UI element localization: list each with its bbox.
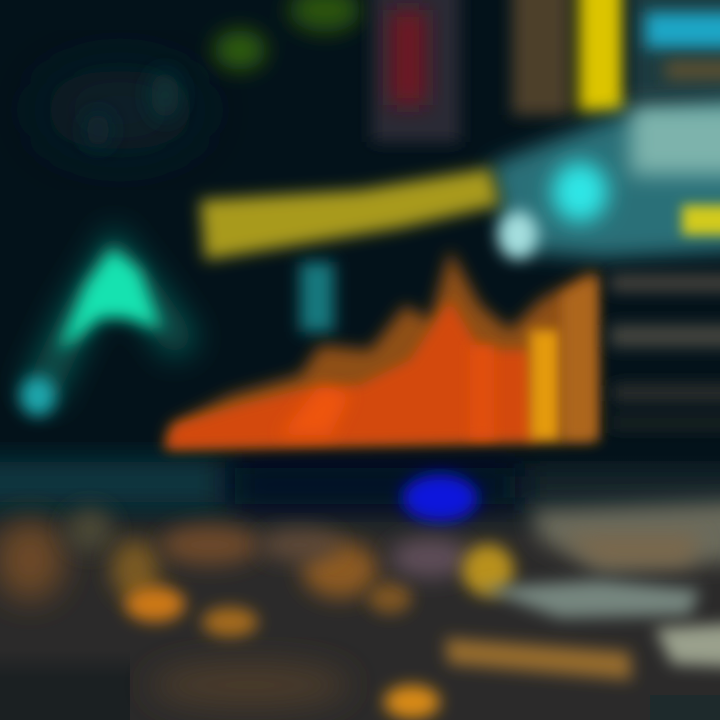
teal peak line chart [20, 248, 185, 416]
coin stacks right [390, 500, 720, 720]
top right bars [512, 0, 720, 115]
yellow headline band [200, 168, 500, 260]
green blobs [86, 0, 361, 148]
coin stacks left [0, 508, 412, 637]
bottom desk area [0, 462, 720, 720]
blue button [402, 474, 478, 522]
bottom foreground blobs [150, 661, 440, 719]
red panel at top [372, 0, 460, 142]
teal right panel [490, 100, 720, 259]
orange area chart [165, 250, 597, 448]
right table rows [610, 275, 720, 428]
top dark screen tint [40, 70, 200, 150]
teal column [300, 262, 334, 332]
